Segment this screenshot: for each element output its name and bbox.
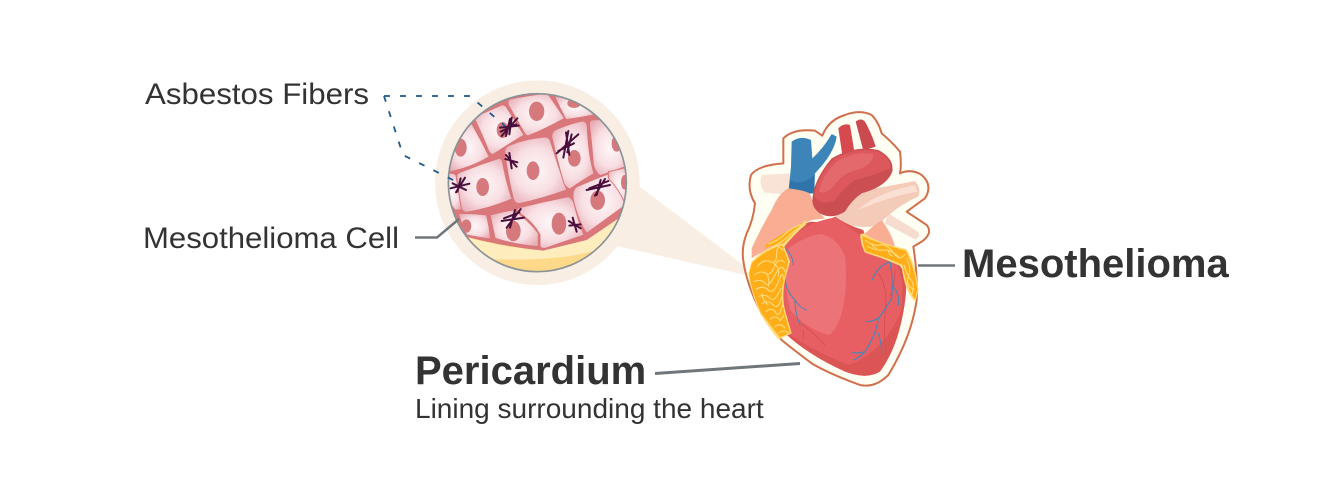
asbestos fibers [451, 118, 610, 232]
leader line: Mesothelioma [918, 264, 955, 267]
ventricle highlight [785, 234, 846, 335]
heart illustration [743, 112, 929, 386]
lens contents [449, 94, 626, 271]
lower right stub [885, 213, 919, 239]
nuclei [455, 99, 628, 241]
left stub [761, 173, 790, 195]
lens rim [448, 94, 626, 272]
fiber leader: dashed lines [384, 96, 505, 181]
aortic arch [812, 149, 893, 216]
coronary vessels [782, 245, 899, 360]
cell leader line [415, 219, 459, 238]
pulmonary arteries [838, 124, 854, 155]
peach atria [752, 188, 825, 258]
cells [443, 93, 630, 248]
surface veins [800, 270, 895, 355]
left fat deposit [748, 220, 807, 339]
pale pulmonary trunk [835, 181, 919, 227]
label: Pericardium: Pericardium [415, 349, 646, 393]
lens halo [435, 80, 640, 285]
zoom wedge connecting lens to heart [612, 184, 750, 276]
magnified cell lens [435, 80, 640, 285]
leader line: Pericardium [655, 364, 800, 374]
right fat deposit [860, 233, 918, 302]
vena cava [788, 134, 837, 193]
great vessels [752, 120, 919, 258]
ventricle [779, 217, 906, 376]
caption: Lining surrounding the heart: Lining surrounding the heart [415, 393, 764, 424]
label: Asbestos Fibers: Asbestos Fibers [145, 78, 369, 111]
label: Mesothelioma Cell: Mesothelioma Cell [143, 222, 399, 255]
infographic: pericardial mesothelioma [145, 80, 1229, 424]
label: Mesothelioma: Mesothelioma [962, 242, 1229, 286]
pericardium outline [743, 112, 929, 386]
